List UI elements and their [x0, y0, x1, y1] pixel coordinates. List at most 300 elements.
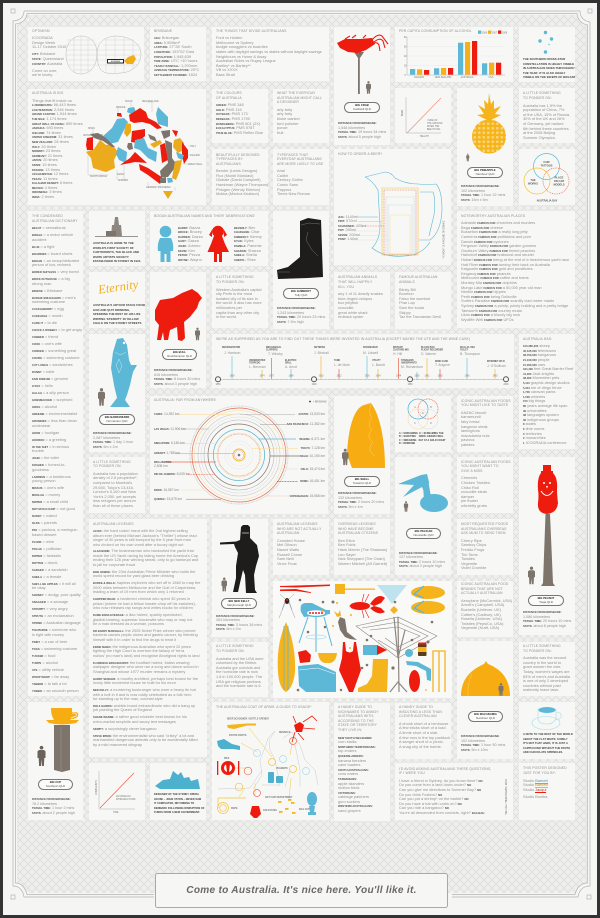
heading: deadly animals: AUSTRALIAN ANIMALS	[338, 275, 377, 279]
illustration: big gumboot	[277, 218, 323, 279]
text block: brisbane statistics: LATITUDE: 27°28' South	[154, 44, 192, 49]
text block: left distances: LAS VEGAS: 11,906 km	[154, 427, 186, 431]
text block: questions list: Do you have a hat with corks on? NO	[399, 801, 462, 806]
text block: flat white note: A NOTE TO THE REST OF THE WORLD	[523, 733, 573, 736]
text block: dictionary entries: BRIZZIE = Brisbane	[32, 288, 62, 293]
text block: southern cross note: CONSTELLATION IS HIGHLY VISIBLE	[523, 62, 574, 66]
text block: studio credits: Studio Barnett	[523, 782, 548, 787]
text block: everyday typeface list: Papyrus	[277, 187, 291, 192]
text block: overseas legends list: Hank Marvin (The Shadows)	[338, 547, 387, 552]
text block: utzon note: FUNDS FROM A NEW GOVERNMENT.	[154, 811, 200, 814]
heading: dictionary: AUSTRALIAN DICTIONARY	[32, 219, 78, 223]
text block: women fact: is one of only 2 developed	[523, 678, 568, 683]
text block: barramundi distance: 2,087 kilometres	[93, 436, 120, 440]
text block: things that fit inside: UNITED KINGDOM: 31 times	[32, 134, 73, 139]
text block: barramundi distance: TRAVEL TIME: 1 day 1 hour	[93, 440, 133, 444]
map: australia made of countries: FRANCE	[116, 106, 126, 109]
panel: nicknames	[334, 703, 390, 821]
text block: insults list: A chook short of a henhouse.	[399, 721, 449, 726]
line chart: whinging poms: COMPLAINTS	[95, 780, 98, 795]
text block: arthur stace note: GOD AND QUIT DRINKING,	[93, 308, 130, 312]
heading: beautifully designed typefaces: AUSTRALIANS	[216, 162, 241, 166]
heading: a little something to ponder on: TO PONDER ON:	[216, 280, 245, 284]
timeline chart: australian inventions: UNDERWATER	[249, 359, 266, 362]
text block: bull distance: STATS: about 3 people high	[154, 382, 197, 386]
text block: overseas legends list: Ben Elton	[338, 538, 355, 543]
text block: legends entries: SHANE WARNE: a rather good cricketer best known for his	[93, 714, 187, 719]
text block: cup distance: DISTANCE FROM BRISBANE:	[32, 798, 71, 801]
text block: insults list: A snag shy of the barbie.	[399, 744, 442, 749]
text block: legends entries: manhandled dangerous animals only to be accidentally killed	[93, 737, 198, 742]
icon: football	[409, 670, 420, 692]
text block: places list: Canberra FAMOUS FOR politicians and porn	[461, 234, 531, 239]
text block: dictionary entries: based dessert	[32, 532, 56, 537]
text block: questions list: Can you ride a kangaroo? NO	[399, 805, 449, 810]
timeline chart: australian inventions: WINE CASK	[435, 360, 448, 363]
text block: things that fit inside: ITALY: 26 times	[32, 144, 56, 149]
text block: utzon note: IT COMPLETED, RETURNING TO	[154, 802, 194, 805]
heading: not actually australian	[277, 522, 327, 536]
text block: designer names: bloke wanker	[277, 116, 300, 121]
text block: brands list: Aeroplane (McCormick, USA)	[461, 598, 512, 603]
text block: dictionary entries: STRUTH = an exclamation	[32, 613, 74, 618]
text block: places list: Mungo Lake FAMOUS FOR a 50,000 year old man	[461, 285, 542, 290]
text block: female names: CHARLENE: Char	[234, 229, 260, 234]
text block: dictionary entries: BOGAN = an unsophisticated	[32, 258, 79, 263]
heading: brisbane: BRISBANE	[154, 29, 172, 33]
text block: women fact: Today, women's wages are	[523, 669, 570, 674]
icon: blue boy and red girl	[158, 226, 229, 262]
text block: homicide fact: and the homicide rate is 6.	[216, 683, 262, 688]
text block: pantone list: GOLD: PMS 116	[216, 107, 242, 112]
text block: left distances: CAIRO: 14,392 km	[154, 412, 179, 416]
panel: coat of arms guide	[212, 702, 329, 820]
text block: female names: SHARON: Shazza	[234, 248, 261, 253]
text block: deadly animals list: blue-ringed octopus	[338, 296, 372, 301]
text block: deadly animals list	[338, 292, 388, 320]
text block: olympics fact: 30% of the UK and 26%	[523, 116, 565, 121]
text block: density fact: Australia has a population	[93, 471, 138, 476]
text block: deadly animals list: great white shark	[338, 310, 368, 315]
text block: foods to miss list: damper	[461, 494, 474, 499]
bar chart: alcohol consumption: 2006	[482, 32, 488, 34]
timeline chart: australian inventions: L. Brennan	[249, 365, 266, 369]
heading: nicknames: NICKNAMES TO ANNOY	[338, 710, 379, 714]
panel: noteworthy australian places	[457, 211, 575, 328]
icon: blue ball	[405, 649, 413, 657]
text block: designer names: turd polisher	[277, 121, 298, 126]
diagram: coat of arms with parts: FOOTIE BOOTS	[229, 735, 247, 737]
chart: venn of australia day: WORKS	[528, 182, 538, 186]
text block: dictionary entries: HOON = hooligan	[32, 430, 59, 435]
text block: typeface list: Mokka (Monica Keatson)	[216, 191, 259, 196]
text block: pineapple distance: 102 kilometres	[461, 189, 485, 193]
text block: legends entries: nullius' (no man's land) and recognise Aboriginal rights to land	[93, 653, 200, 658]
text block: event details: CITY: Brisbane	[32, 51, 55, 56]
text block: legends entries: with a bolt in it and is now oddly celebrated as a folk hero	[93, 692, 191, 696]
icon: plate with knife and fork	[217, 761, 239, 775]
label: big peanut: Tiaga QLD	[539, 600, 553, 604]
label: big macadamia: BIG MACADAMIA	[474, 713, 497, 716]
text block: right distances: TOKYO: 7,128 km	[301, 446, 325, 450]
text block: pantone list	[216, 102, 263, 135]
text block: typeface list: Flux (Monib Mahdavi)	[216, 173, 253, 178]
panel: designer names	[273, 89, 329, 143]
text block: women fact	[523, 656, 573, 693]
icon: fly swatter	[335, 584, 375, 594]
text block: deadly animals list: crocodile	[338, 305, 354, 310]
text block: dictionary entries: BOARDIES = board shorts	[32, 251, 72, 256]
icon: meat pie box	[298, 650, 311, 663]
panel: legends not actually australian	[273, 519, 329, 575]
text block: legends entries: lovely little modernist house he built for his mum	[93, 680, 176, 685]
heading: typefaces everyday australians use: EVERYDAY AUSTRALIANS	[277, 157, 322, 161]
text block: cartoonists note: ESTABLISHED IN SYDNEY IN 1924.	[93, 259, 141, 263]
text block: legends entries: world speed record for yard glass beer drinking	[93, 573, 174, 578]
panel: inventions timeline	[212, 334, 514, 388]
text block: dictionary entries: BUDGIE SMUGGLERS = men's	[32, 295, 76, 300]
text block: gumboot distance: TRAVEL TIME: 20 hours 23 mins	[277, 315, 325, 319]
text block: requested foods list: Samboy Chips	[461, 542, 486, 547]
label: big barramundi: BIG BARRAMUNDI	[105, 416, 129, 419]
heading: nicknames: AUSTRALIANS WITH,	[338, 714, 374, 718]
text block: nicknames list: top enders	[338, 748, 356, 753]
chart: venn of australia day: AUSTRALIA DAY	[537, 198, 558, 202]
text block: male names: GARY: Gazza	[178, 238, 199, 243]
timeline chart: australian inventions: H. Hill	[393, 352, 402, 356]
icon: vegemite jar	[418, 642, 426, 656]
text block: female names: BEVERLY: Bev	[234, 225, 255, 230]
text block: foods to taste list: kangaroo steak	[461, 424, 488, 429]
text block: perth fact: in the world.	[216, 314, 237, 319]
text block: things that fit inside: SPAIN: 15 times	[32, 162, 57, 167]
heading: a little something to ponder on: TO PONDER ON:	[93, 464, 122, 468]
panel: questions to avoid	[395, 763, 513, 820]
heading: a little something to ponder on: TO PONDER ON:	[523, 96, 552, 100]
text block: rivalries list: Bartley* vs Bartley**	[216, 63, 251, 68]
panel: big macadamia	[457, 641, 513, 759]
text block: olympics fact: of the USA, 15% of Russia,	[523, 112, 570, 117]
panel: bogan names	[150, 211, 268, 266]
text block: barramundi distance	[93, 431, 133, 449]
text block: australia statistics: 15,000,000 cars	[523, 362, 545, 367]
heading: iconic brands: ICONIC AUSTRALIAN FOOD	[461, 582, 508, 586]
icon: sunscreen bottle	[363, 645, 387, 655]
text block: insults list	[399, 722, 449, 749]
line chart: whinging poms: AUSTRALIAN	[116, 795, 131, 798]
text block: places list: Kalgoorlie FAMOUS FOR gold and prostitutes	[461, 266, 533, 271]
text block: arthur stace note: WRITING 'ETERNITY' IN YELLOW	[93, 317, 139, 321]
text block: dictionary entries: TIGHTARSE = someone who	[32, 627, 76, 632]
icon: hills hoist	[356, 617, 437, 692]
text block: famous animals list: Fatso the wombat	[399, 296, 430, 301]
text block: dictionary entries: MISSUS = one's wife	[32, 485, 64, 490]
timeline chart: australian inventions: 1980	[464, 376, 470, 378]
text block: legends entries: bacteria causes peptic ulcers and gastric cancer, by infecting	[93, 632, 198, 637]
text block: dictionary entries: STRINE = Australian language	[32, 620, 81, 625]
heading: poster credits: THIS POSTER DESIGNED	[523, 766, 567, 770]
icon: cockatoo	[334, 610, 357, 640]
text block: perth fact: millionaires per	[216, 305, 242, 310]
text block: foods to taste list	[461, 411, 511, 448]
heading: questions to avoid: I'D AVOID ASKING AUSTRALIANS THESE QUESTIONS,	[399, 767, 491, 771]
timeline chart: australian inventions: TORPEDO	[249, 362, 261, 364]
text block: australia statistics: 100,380,000 sheep	[523, 343, 550, 348]
text block: ned kelly distance: 264 kilometres	[216, 618, 240, 622]
text block: dictionary entries: JOHN = the toilet	[32, 455, 59, 460]
text block: places list: Melbourne FAMOUS FOR coffee and trams	[461, 275, 529, 280]
text block: crab distance	[338, 122, 386, 139]
text block: dictionary entries: swimming costume	[32, 299, 65, 304]
panel: eternity	[89, 272, 145, 328]
diagram: coat of arms with parts: HOT CHIP DEPARTMENT	[265, 796, 293, 799]
text block: female names: PAMELA: Pammie	[234, 243, 262, 248]
text block: venn key: A = SCREAMING E = SCREAMING THE	[399, 433, 444, 435]
label: big macadamia	[468, 711, 503, 722]
panel: southern cross	[519, 27, 575, 82]
illustrations: collection of australian objects	[273, 581, 452, 698]
text block: pineapple distance: TRAVEL TIME: 1 hour 22 mins	[461, 193, 505, 197]
text block: famous animals list: Sam the koala	[399, 305, 424, 310]
text block: dictionary entries: GALAH = a silly person	[32, 390, 69, 395]
heading: what australians call a designer	[277, 91, 322, 104]
heading: poster credits	[523, 766, 573, 776]
heading: dictionary	[32, 214, 78, 223]
text block: dictionary entries: WOOP WOOP = far away	[32, 674, 69, 679]
text block: places list: Darwin FAMOUS FOR cyclones	[461, 239, 509, 244]
panel: big pineapple	[457, 88, 513, 206]
icon: surfboard	[278, 622, 295, 692]
panel: big pelican	[395, 457, 451, 575]
timeline chart: australian inventions: B. Thompson	[460, 352, 480, 356]
text block: questions list: Do you come from a land down under? NO	[399, 782, 471, 787]
text block: questions list: You're all descended from convicts, right? BAA BAH	[399, 810, 484, 815]
heading: australian legends: AUSTRALIAN LEGENDS	[93, 522, 134, 526]
panel: ponder women	[519, 642, 575, 696]
text block: perth fact: Western Australia's capital	[216, 287, 261, 292]
text block: ned kelly distance: TRAVEL TIME: 3 hours 38 mins	[216, 623, 262, 627]
icon: bottle opener	[227, 724, 256, 729]
text block: things that fit inside: GREAT WALL OF CHINA: 890 times	[32, 121, 83, 126]
heading: not actually australian: AUSTRALIAN	[277, 531, 300, 535]
text block: arthur stace note: AUSTRALIA'S ARTHUR STACE FOUND	[93, 303, 145, 307]
text block: overseas legends list	[338, 539, 388, 566]
text block: dictionary entries: BINGLE = a motor vehicle	[32, 232, 73, 237]
text block: event details: 11-17 October 2010	[32, 44, 66, 49]
panel: big bull	[150, 272, 206, 388]
bar chart: alcohol consumption: 80	[404, 37, 407, 39]
chart: four circle venn: A	[414, 406, 416, 409]
chart: venn of australia day: FAIR	[544, 160, 550, 164]
text block: designer names: arty farty	[277, 107, 292, 112]
text block: left distances: SINGAPORE: 6,180 km	[154, 441, 185, 445]
text block: event details: ICOGRADA	[32, 35, 53, 40]
text block: utzon note: DESIGNER OF THE SYDNEY OPERA	[154, 793, 199, 796]
text block: nicknames list: banana benders	[338, 758, 366, 763]
text block: density fact: 29,650, Tokyo's 13,416,	[93, 485, 134, 490]
text block: ned kelly distance: DISTANCE FROM BRISBANE:	[216, 614, 255, 618]
icon: jars	[268, 772, 283, 783]
text block: flat white note: ABOUT THE FLAT WHITE: SURELY	[523, 738, 568, 741]
illustration: big cup on plinth with person	[28, 702, 83, 820]
text block: australia statistics: 1,500 wineries	[523, 394, 545, 399]
heading: foods to taste: YOU MIGHT LIKE TO TASTE	[461, 403, 508, 407]
map: australia made of countries: UNITED KINGDOM	[83, 135, 103, 137]
text block: questions list: Can you give me directions to Summer Bay? NO	[399, 787, 481, 792]
label: big ned kelly: Maryborough QLD	[227, 603, 251, 607]
text block: pineapple distance: DISTANCE FROM BRISBANE:	[461, 185, 500, 188]
text block: nicknames list	[338, 736, 388, 814]
heading: questions to avoid	[399, 767, 511, 776]
text block: women fact: 83% of men's and Australia	[523, 674, 570, 679]
icons: flies	[297, 599, 433, 691]
text block: things that fit inside: LUXEMBOURG: 66,443 times	[32, 102, 76, 107]
heading: most requested foods: ASK MUM TO SEND THEM	[461, 531, 506, 535]
text block: dictionary entries: SNAGGER = a sausage	[32, 599, 68, 604]
panel: black and white artists society	[89, 211, 145, 266]
map: australia made of countries: GERMANY	[146, 186, 158, 189]
text block: requested foods list: Violet Crumble	[461, 565, 486, 570]
label: big ned kelly: BIG NED KELLY	[229, 600, 249, 603]
text block: foods to miss list: Chiko Roll	[461, 485, 479, 490]
text block: legends entries: made the US Yacht racing by taking home the America's Cup	[93, 553, 198, 558]
text block: right distances: BEIJING: 6,371 km	[299, 437, 325, 441]
panel: big barramundi	[89, 334, 145, 452]
text block: utzon note: DENMARK FOLLOWING DISRUPTION OF	[154, 807, 205, 810]
text block: pantone list: TRUE BLUE: PMS Reflex Blue	[216, 130, 263, 135]
map: australia made of countries: INDONESIA	[158, 186, 171, 189]
text block: dictionary entries: HOOROO = a greeting	[32, 437, 66, 442]
text block: australia statistics: 8 states	[523, 421, 536, 426]
heading: famous animals: ANIMALS	[399, 280, 415, 284]
text block: overseas legends list: Warren Mitchell (Alf Garnett)	[338, 561, 387, 566]
text block: things that fit inside: INDIA: 2 times	[32, 194, 54, 199]
illustration: ned kelly silhouette with gun and person	[212, 519, 268, 637]
heading: things that divide: THE THINGS THAT DIVIDE AUSTRALIANS	[216, 29, 287, 33]
text block: pantone list: BUNDABERG: PMS 801 (2X)	[216, 121, 260, 126]
text block: typeface list: Hawkman (Wayne Thompson)	[216, 182, 268, 187]
text block: dictionary entries: SHONKY = dodgy, poor quality	[32, 592, 81, 597]
heading: foods to taste	[461, 399, 511, 408]
text block: things that fit inside	[32, 98, 83, 199]
text block: dictionary entries: SHE'LL BE APPLES = it will all	[32, 581, 76, 586]
text block: places list: Uluru FAMOUS FOR a bloody big rock	[461, 312, 520, 317]
text block: event details: Design Week	[32, 40, 55, 45]
label: big cup: Southport QLD	[46, 784, 65, 788]
text block: nicknames list: corn stalks	[338, 739, 357, 744]
text block: brands list: Twisties (PepsiCo, USA)	[461, 621, 503, 626]
chart: four circle venn: E	[422, 413, 424, 415]
radial distance chart	[150, 396, 328, 514]
text block: crab distance: DISTANCE FROM BRISBANE:	[338, 122, 377, 125]
text block: legends entries: ROLF HARRIS: wobble-board extraordinaire who did a bang up	[93, 703, 195, 708]
timeline chart: australian inventions: 1944	[396, 376, 402, 378]
text block: dictionary entries: CACKLEBERRY = egg	[32, 306, 64, 311]
text block: legends entries: SKIPPY: a surprisingly clever kangaroo	[93, 726, 157, 731]
illustration: big crab on pole with person	[337, 34, 388, 94]
text block: australia statistics: 36 indigenous groups	[523, 417, 559, 422]
text block: ned kelly distance	[216, 614, 262, 632]
heading: not actually australian: AUSTRALIAN LEGENDS	[277, 522, 318, 526]
text block: beer sizes: POT: 285ml	[338, 227, 356, 232]
text block: pelican distance: STATS: about 3 people high	[399, 564, 442, 568]
text block: everyday typeface list	[277, 168, 310, 196]
text block: dictionary entries: TURPS = alcohol	[32, 660, 58, 665]
heading: how to order a beer: HOW TO ORDER A BEER?	[338, 152, 382, 156]
text block: legends list: Vince Frost	[277, 561, 297, 566]
text block: women fact: country in the world to	[523, 660, 561, 665]
text block: things that fit inside: AFGHANISTAN: 12 times	[32, 171, 68, 176]
text block: dictionary entries: CUT LUNCH = sandwiches	[32, 362, 73, 367]
heading: overseas legends: AUSTRALIAN CITIZENS	[338, 531, 378, 535]
label: big pelican: Noosaville QLD	[413, 533, 434, 537]
text block: legends list	[277, 539, 327, 566]
footer tagline box	[155, 873, 448, 908]
text block: places list: Nimbin FAMOUS FOR hippies	[461, 289, 506, 294]
text block: pantone list: REDBACK: PMS 1795	[216, 116, 250, 121]
text block: dictionary entries: BORED SHITLESS = very bored	[32, 269, 79, 274]
text block: places list: Busselton FAMOUS FOR a really long jetty	[461, 229, 528, 234]
chart: venn of australia day: MODELS	[553, 182, 565, 186]
icon: flat white cup	[519, 702, 575, 759]
text block: left distances: PARIS: 16,557 km	[154, 488, 179, 492]
panel: venn diagram grand final	[395, 396, 451, 452]
text block: male names	[178, 225, 203, 262]
heading: a little something to ponder on	[523, 91, 561, 100]
text block: male names: JOHN: Johnno	[178, 243, 200, 248]
text block: nicknames list: NORTHERN TERRITORIANS:	[338, 746, 376, 749]
text block: venn key: C = SWEARING DAY AT A GOLD COAST	[399, 440, 446, 442]
text block: peanut distance: STATS: about 8 people high	[523, 624, 566, 628]
text block: cup distance: STATS: about 2 people high	[32, 811, 75, 815]
map: australia made of countries: JAPAN	[117, 173, 125, 176]
panel: big cup	[28, 702, 83, 820]
text block: insults list: A tinnie short of a slab.	[399, 730, 438, 735]
text block: dictionary entries: DUNNY = toilet	[32, 369, 54, 374]
text block: foods to taste list: barramundi	[461, 414, 481, 419]
text block: dictionary entries: underwear	[32, 423, 50, 428]
text block: left distances: HOBART: 1,788 km	[154, 451, 180, 455]
heading: typefaces everyday australians use: ARE MORE LIKELY TO USE	[277, 162, 323, 166]
timeline chart: australian inventions: CUSTARD MIX	[393, 348, 409, 352]
text block: beer sizes: PONY: 140ml	[338, 236, 358, 241]
panel: big peanut	[519, 457, 575, 635]
heading: noteworthy places: NOTEWORTHY AUSTRALIAN PLACES	[461, 214, 525, 218]
text block: male names: WAYNE: Wayno	[178, 257, 202, 262]
icon: gold pieces	[278, 799, 296, 814]
text block: legends entries: HARRY SEIDLER: a mouthy architect, perhaps best known for the	[93, 676, 198, 681]
text block: legends entries: STEVE IRWIN: the environmentalist who said "crikey" a lot and	[93, 733, 194, 738]
text block: foods to taste list: macadamia nuts	[461, 433, 490, 438]
bar chart: alcohol consumption	[404, 30, 508, 79]
heading: a little something to ponder on: TO PONDER ON:	[523, 649, 552, 653]
text block: beer sizes: SEVEN: 200ml	[338, 232, 360, 237]
heading: overseas legends: WHO HAVE BECOME	[338, 527, 374, 531]
text block: right distances	[287, 412, 325, 498]
label: big ned kelly	[221, 598, 257, 608]
text block: legends entries: fighting the High Court to overturn the fallacy of 'terra	[93, 648, 184, 653]
text block: bull distance	[154, 369, 200, 386]
timeline chart: australian inventions: PACEMAKER	[363, 346, 378, 349]
text block: questions list: Can you put a shrimp* on the barbie? NO	[399, 796, 469, 801]
text block: requested foods list: Cherry Ripe	[461, 538, 482, 543]
text block: rivalries list: states with daylight savings vs states without daylight savings	[216, 49, 322, 54]
text block: australia statistics: 5,331 km of dingo fence	[523, 385, 562, 390]
line chart: beer vs health	[401, 97, 443, 138]
heading: insulting guide: INSULTING A LESS THAN	[399, 710, 442, 714]
text block: shell distance: DISTANCE FROM BRISBANE:	[338, 492, 377, 495]
label: big shell: BIG SHELL	[355, 478, 369, 481]
